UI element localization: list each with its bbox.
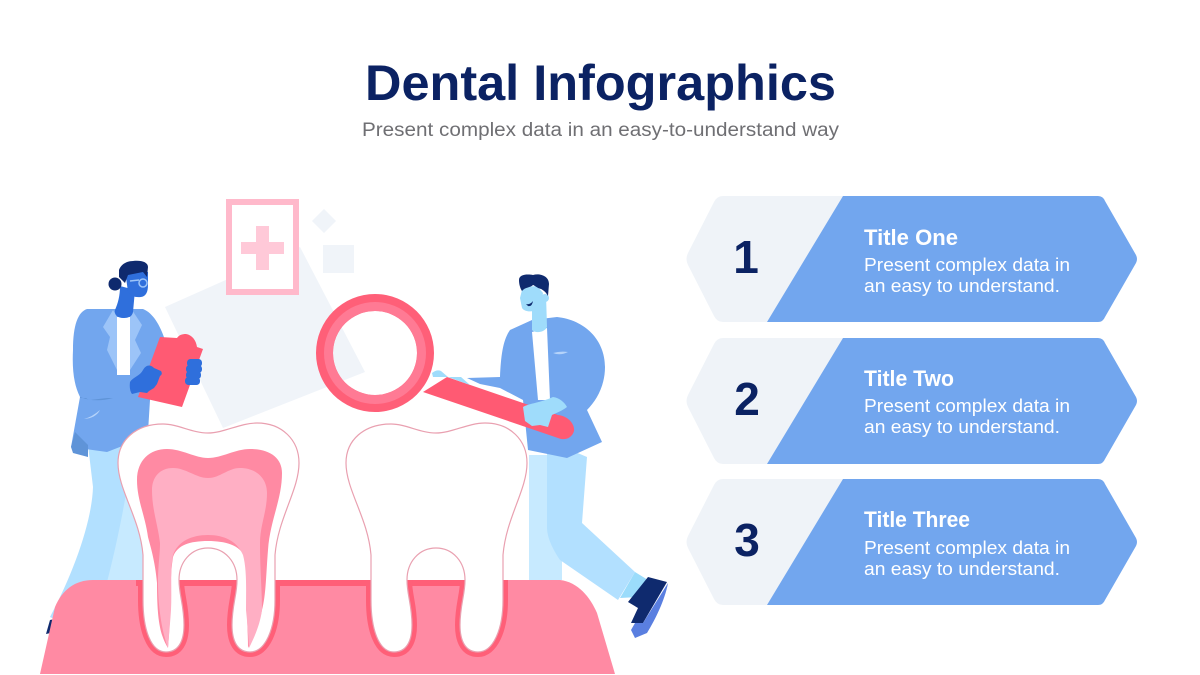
step description: an easy to understand. [864, 417, 1060, 437]
tooth cross-section [118, 423, 299, 652]
content arrow [767, 338, 1137, 464]
step title: Title Two [864, 366, 954, 391]
panel: step 3 [686, 479, 1137, 605]
number: 1 [733, 231, 759, 283]
healthy tooth [346, 423, 527, 652]
tooth pulp [152, 468, 267, 648]
step description: an easy to understand. [864, 559, 1060, 579]
magnifying glass [316, 294, 574, 439]
tooth socket [366, 580, 508, 657]
tooth socket [138, 586, 280, 657]
title: Dental Infographics [365, 55, 836, 111]
step description: Present complex data in [864, 255, 1070, 275]
gum [40, 580, 615, 674]
content arrow [767, 479, 1137, 605]
step title: Title Three [864, 507, 970, 532]
step title: Title One [864, 225, 958, 250]
number: 2 [734, 373, 760, 425]
gum line [136, 580, 507, 586]
dental illustration [40, 202, 668, 674]
tooth body [346, 423, 527, 652]
dentist woman with clipboard [46, 261, 203, 634]
number tab [686, 479, 850, 605]
dentist man [467, 274, 668, 638]
number tab [686, 196, 850, 322]
step description: an easy to understand. [864, 276, 1060, 296]
number: 3 [734, 514, 760, 566]
header [362, 55, 840, 141]
step description: Present complex data in [864, 396, 1070, 416]
subtitle: Present complex data in an easy-to-understand way [362, 120, 840, 141]
tooth dentin [137, 449, 282, 648]
content arrow [767, 196, 1137, 322]
number tab [686, 338, 850, 464]
tooth enamel [118, 423, 299, 652]
icon: medical cross sign [229, 202, 296, 292]
panel: step 2 [686, 338, 1137, 464]
step description: Present complex data in [864, 538, 1070, 558]
background shapes [165, 209, 365, 428]
panel: step 1 [686, 196, 1137, 322]
